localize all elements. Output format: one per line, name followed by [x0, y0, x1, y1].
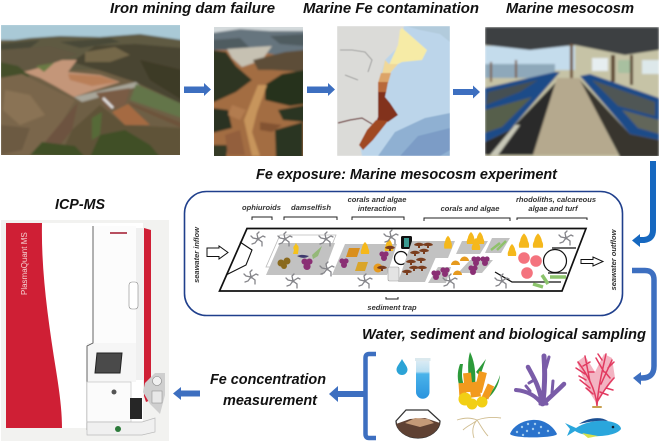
- drain circle: [544, 250, 566, 272]
- damselfish tray: [266, 235, 336, 275]
- arrow: dam to tailings: [184, 83, 211, 96]
- title: iron mining dam failure: Iron mining dam failure: [110, 0, 275, 17]
- outflow structure: [495, 248, 576, 282]
- map: Fe contamination on coast: [337, 26, 450, 156]
- sediment trap jar: [388, 267, 399, 281]
- label: seawater inflow: seawater inflow: [192, 226, 201, 283]
- sample pump: [143, 373, 165, 414]
- text: Fe concentration measurement: [210, 371, 326, 409]
- icon: water drop: [396, 359, 408, 375]
- outflow arrow: [581, 257, 603, 266]
- interaction tray: [332, 239, 397, 275]
- icon: red fan coral: [576, 354, 615, 407]
- label: corals and algae interaction: corals and algae: [348, 195, 406, 204]
- label: corals and algae interaction: interaction: [358, 204, 397, 213]
- photo: mud valley: [212, 25, 305, 158]
- icon: sediment bowl: [396, 410, 440, 438]
- title: marine Fe contamination: Marine Fe contamination: [303, 0, 479, 17]
- ophiuroids in tank: [244, 230, 573, 288]
- heading: ICP-MS: ICP-MS: [55, 196, 105, 213]
- hobo logger: [401, 236, 412, 249]
- lower cabinet: [87, 382, 131, 422]
- label: rhodoliths, calcareous algae and turf: rhodoliths, calcareous: [516, 195, 596, 204]
- arrow: mesocosm to experiment: [638, 161, 653, 240]
- base unit: [87, 418, 155, 435]
- arrowhead: into experiment panel: [632, 234, 640, 247]
- panel: Fe exposure experiment: [184, 166, 622, 316]
- instrument: ICP-MS machine: [1, 220, 169, 441]
- photo: outdoor mesocosm tanks: [485, 27, 659, 157]
- label brackets: [252, 217, 587, 299]
- icon: ophiuroid: [457, 417, 501, 438]
- tank outline: [220, 228, 586, 291]
- brand text on panel: PlasmaQuant MS: [20, 232, 29, 295]
- icon: purple branching coral: [516, 356, 564, 404]
- right red strip: [144, 228, 151, 402]
- icon: blue rhodolith: [510, 420, 557, 437]
- brand mark: [110, 232, 127, 234]
- inflow structure: [226, 242, 252, 275]
- red side panel: [6, 223, 62, 428]
- heading: experiment: Fe exposure: Marine mesocosm experiment: [256, 166, 558, 183]
- corals tray left: [398, 241, 443, 282]
- icon: orange and yellow algae: [458, 352, 500, 410]
- label: corals and algae: corals and algae: [441, 204, 499, 213]
- icon: test tube: [415, 358, 430, 399]
- rhodoliths and calcareous algae: [518, 233, 566, 287]
- label: damselfish: damselfish: [291, 203, 331, 212]
- panel frame: [184, 192, 622, 316]
- label: seawater outflow: seawater outflow: [609, 228, 618, 290]
- arrow: sampling to measurement with bracket: [329, 354, 376, 438]
- arrow: experiment to sampling: [632, 270, 654, 385]
- arrow: map to mesocosm: [453, 86, 480, 98]
- text: Fe concentration measurement: Fe concentration: [210, 371, 326, 388]
- touch screen: [95, 353, 122, 373]
- title: marine mesocosm: Marine mesocosm: [506, 0, 634, 17]
- photo: dam landscape: [0, 24, 182, 157]
- arrow: to ICP-MS: [173, 387, 200, 400]
- icon: blue damselfish: [565, 418, 621, 438]
- heading: sampling: Water, sediment and biological sampling: [362, 326, 646, 343]
- label: sediment trap: sediment trap: [367, 303, 417, 312]
- text: Fe concentration measurement: measurement: [223, 392, 318, 409]
- sediment ring: [394, 252, 408, 264]
- arrow: tailings to map: [307, 83, 335, 96]
- corals trays right: [428, 232, 516, 283]
- inflow arrow: [207, 246, 228, 259]
- label: ophiuroids: ophiuroids: [242, 203, 281, 212]
- label: rhodoliths, calcareous algae and turf: algae and turf: [528, 204, 579, 213]
